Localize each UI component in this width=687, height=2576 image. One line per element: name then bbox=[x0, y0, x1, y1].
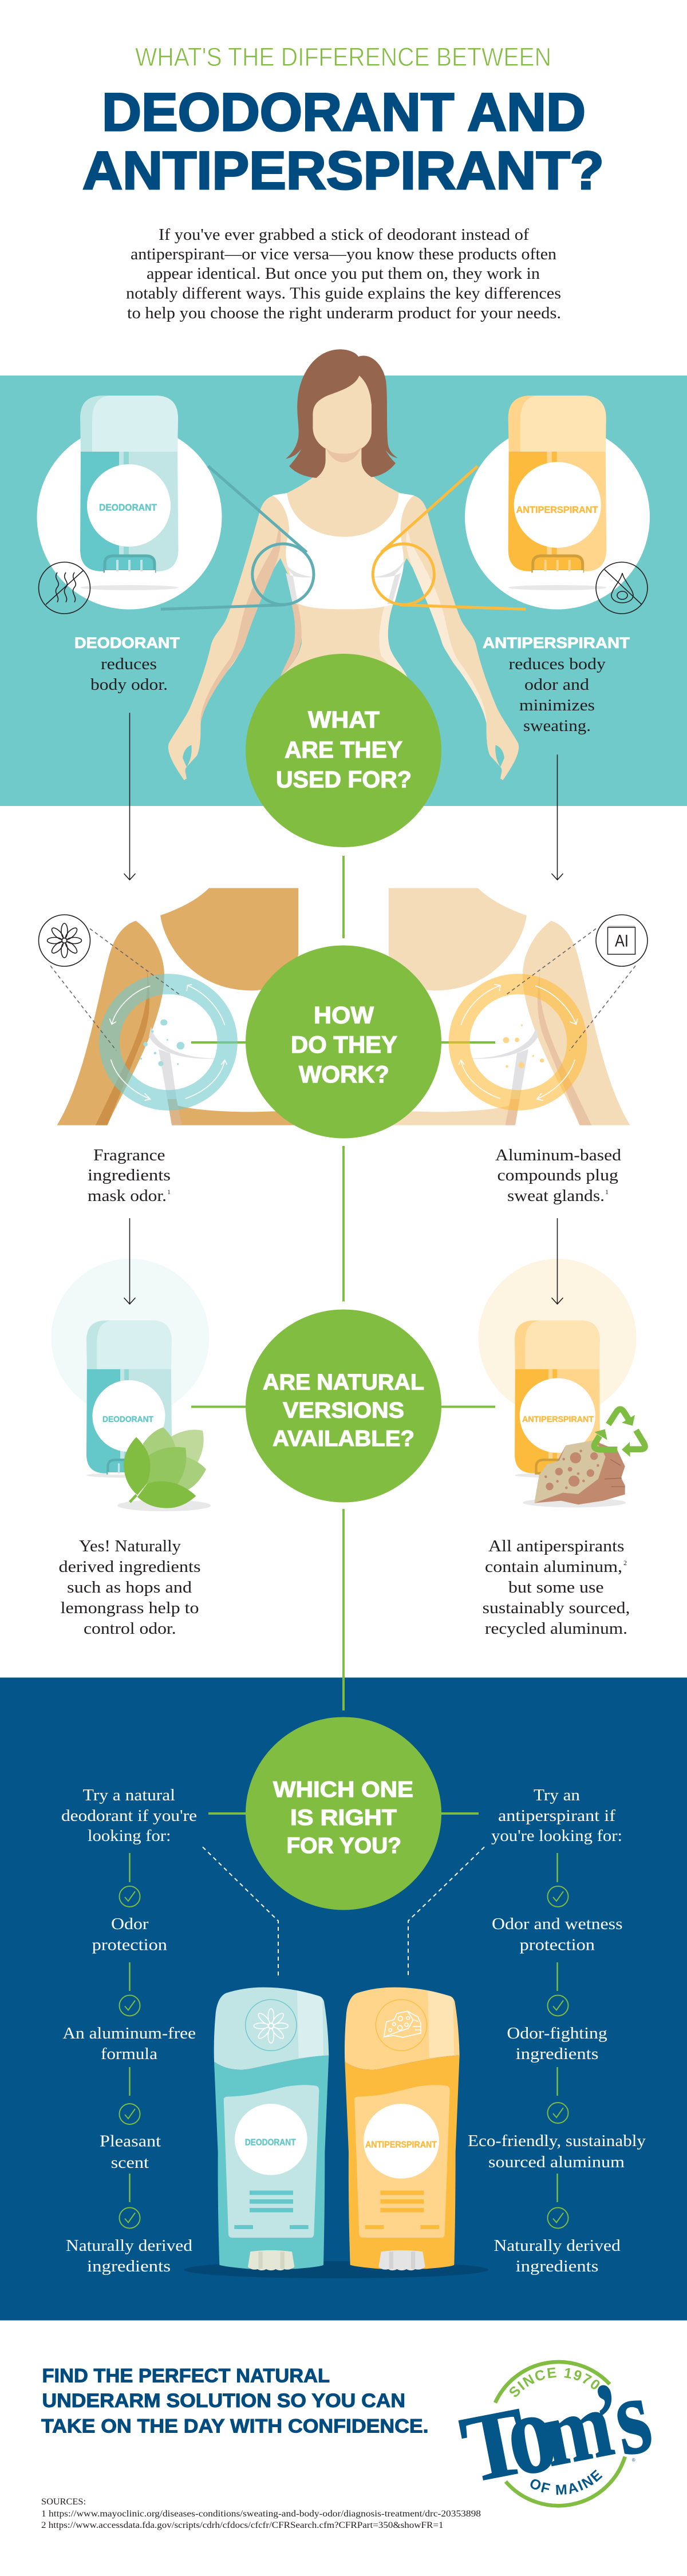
deodorant use text: body odor. bbox=[90, 676, 168, 694]
callout ring: right underarm bbox=[373, 466, 526, 609]
cap emblem: flower bbox=[246, 2000, 297, 2050]
deodorant mechanism text bbox=[88, 1147, 171, 1205]
antiperspirant use text: ANTIPERSPIRANT bbox=[483, 634, 630, 651]
deodorant use text bbox=[74, 634, 180, 694]
ring bbox=[99, 974, 238, 1111]
badge: how do they work: HOW bbox=[314, 1002, 374, 1028]
intro paragraph bbox=[126, 226, 561, 322]
antiperspirant checklist: Odor and wetness bbox=[492, 1915, 623, 1933]
deodorant checklist bbox=[61, 1787, 197, 2275]
arrow: to natural antiperspirant bbox=[552, 1218, 563, 1304]
closing statement bbox=[41, 2365, 428, 2437]
antiperspirant mechanism text: sweat glands. bbox=[507, 1187, 605, 1205]
logo: Tom's of Maine: ® bbox=[632, 2458, 635, 2463]
callout ring: left underarm bbox=[161, 466, 314, 609]
illustration: deodorant stick large: DEODORANT bbox=[245, 2138, 296, 2147]
badge: are natural versions available: VERSIONS bbox=[283, 1398, 404, 1423]
icon: no odor bbox=[39, 562, 90, 614]
badge: what are they used for bbox=[246, 654, 441, 847]
antiperspirant checklist: protection bbox=[520, 1937, 595, 1954]
intro paragraph: to help you choose the right underarm product for your needs. bbox=[127, 304, 561, 322]
arrow: deodorant down bbox=[124, 713, 135, 880]
deodorant mechanism text: mask odor. bbox=[88, 1187, 167, 1205]
pale circle left bbox=[52, 1259, 210, 1417]
intro paragraph: antiperspirant—or vice versa—you know these products often bbox=[131, 245, 557, 263]
natural antiperspirant text: sustainably sourced, bbox=[483, 1599, 630, 1617]
antiperspirant mechanism text bbox=[495, 1147, 621, 1205]
main title: ANTIPERSPIRANT? bbox=[82, 140, 604, 200]
logo: Tom's of Maine: ’ bbox=[587, 2362, 630, 2471]
deodorant mechanism text: Fragrance bbox=[93, 1147, 165, 1164]
badge: how do they work bbox=[246, 946, 441, 1138]
check icons bbox=[119, 1886, 140, 2228]
logo: Tom's of Maine: SINCE 1970 bbox=[510, 2368, 600, 2397]
natural antiperspirant text: recycled aluminum. bbox=[485, 1620, 627, 1638]
deodorant checklist: formula bbox=[101, 2045, 158, 2063]
badge: which one is right for you: WHICH ONE bbox=[273, 1777, 413, 1802]
panel: which one is right for you bbox=[0, 1677, 687, 2321]
sources: 1 https://www.mayoclinic.org/diseases-conditions/sweating-and-body-odor/diagnosis-treatment/drc-20353898 bbox=[41, 2509, 481, 2519]
sources: SOURCES: bbox=[41, 2497, 86, 2507]
deodorant stick bbox=[80, 396, 179, 590]
intro paragraph: notably different ways. This guide explains the key differences bbox=[126, 284, 561, 302]
antiperspirant mechanism text: compounds plug bbox=[497, 1167, 618, 1184]
badge: what are they used for: WHAT bbox=[308, 706, 380, 733]
antiperspirant use text: reduces body bbox=[508, 655, 606, 673]
illustration: woman bbox=[161, 349, 526, 780]
ring bbox=[449, 974, 587, 1111]
panel: footer call to action bbox=[41, 2354, 660, 2530]
closing statement: UNDERARM SOLUTION SO YOU CAN bbox=[42, 2390, 405, 2412]
shadow under sticks bbox=[184, 2261, 488, 2278]
deodorant checklist: An aluminum-free bbox=[62, 2025, 196, 2042]
badge: which one is right for you bbox=[246, 1717, 441, 1910]
pale circle right bbox=[479, 1259, 637, 1417]
body bbox=[168, 442, 519, 780]
antiperspirant stick small: ANTIPERSPIRANT bbox=[522, 1415, 594, 1424]
antiperspirant checklist: antiperspirant if bbox=[498, 1807, 616, 1825]
white circle behind deodorant bbox=[37, 425, 222, 609]
illustration: deodorant stick large bbox=[214, 1988, 329, 2270]
antiperspirant checklist: Try an bbox=[534, 1787, 580, 1804]
deodorant mechanism text: 1 bbox=[167, 1188, 171, 1196]
deodorant use text: reduces bbox=[101, 655, 157, 673]
deodorant checklist: Naturally derived bbox=[66, 2237, 192, 2255]
main title bbox=[82, 82, 604, 200]
natural deodorant text: control odor. bbox=[84, 1620, 176, 1638]
badge: how do they work: DO THEY bbox=[291, 1031, 397, 1058]
hair bbox=[286, 349, 398, 478]
badge: what are they used for: ARE THEY bbox=[285, 736, 402, 762]
panel: how do they work bbox=[39, 856, 647, 1302]
deodorant checklist: Pleasant bbox=[100, 2133, 161, 2150]
white bra bbox=[273, 493, 414, 609]
logo: Tom's of Maine bbox=[453, 2354, 660, 2508]
antiperspirant checklist: you're looking for: bbox=[491, 1827, 622, 1845]
arrow: antiperspirant down bbox=[552, 754, 563, 880]
natural antiperspirant text: but some use bbox=[508, 1579, 604, 1597]
deodorant mechanism text: ingredients bbox=[88, 1167, 171, 1184]
icon: aluminum element: AI bbox=[615, 932, 629, 950]
natural antiperspirant text: 2 bbox=[623, 1559, 627, 1567]
logo: Tom's of Maine: m bbox=[534, 2372, 620, 2486]
logo: Tom's of Maine: T bbox=[453, 2387, 536, 2503]
deodorant stick: DEODORANT bbox=[99, 502, 157, 513]
deodorant checklist: ingredients bbox=[87, 2258, 171, 2275]
closing statement: TAKE ON THE DAY WITH CONFIDENCE. bbox=[41, 2416, 428, 2437]
deodorant checklist: Odor bbox=[111, 1915, 149, 1933]
antiperspirant use text bbox=[483, 634, 630, 735]
antiperspirant use text: sweating. bbox=[523, 717, 591, 735]
intro paragraph: If you've ever grabbed a stick of deodorant instead of bbox=[159, 226, 529, 244]
title block bbox=[82, 42, 604, 322]
antiperspirant checklist: ingredients bbox=[516, 2045, 598, 2063]
illustration: deodorant underarm bbox=[57, 888, 298, 1125]
deodorant use text: DEODORANT bbox=[74, 634, 180, 651]
white circle behind antiperspirant bbox=[465, 425, 650, 609]
arrow: to natural deodorant bbox=[124, 1218, 135, 1304]
illustration: leaves bbox=[117, 1427, 211, 1511]
natural antiperspirant text: All antiperspirants bbox=[488, 1538, 624, 1555]
logo: Tom's of Maine: OF MAINE bbox=[530, 2470, 602, 2495]
deodorant stick small: DEODORANT bbox=[102, 1415, 153, 1424]
antiperspirant checklist: sourced aluminum bbox=[488, 2154, 625, 2171]
main title: DEODORANT AND bbox=[102, 82, 586, 142]
antiperspirant mechanism text: Aluminum-based bbox=[495, 1147, 621, 1164]
icon: flower fragrance bbox=[39, 915, 90, 966]
closing statement: FIND THE PERFECT NATURAL bbox=[42, 2365, 330, 2387]
antiperspirant checklist: ingredients bbox=[516, 2258, 598, 2275]
natural antiperspirant text: contain aluminum, bbox=[485, 1558, 622, 1576]
antiperspirant checklist bbox=[468, 1787, 646, 2275]
badge: are natural versions available: AVAILABLE? bbox=[273, 1427, 414, 1451]
badge: what are they used for: USED FOR? bbox=[276, 766, 412, 792]
badge: are natural versions available: ARE NATURAL bbox=[263, 1370, 424, 1394]
panel: what are they used for bbox=[0, 349, 687, 806]
antiperspirant use text: minimizes bbox=[519, 697, 595, 714]
icon: aluminum element bbox=[596, 915, 647, 966]
deodorant stick small bbox=[86, 1321, 172, 1477]
illustration: antiperspirant underarm bbox=[389, 888, 630, 1125]
deodorant checklist: deodorant if you're bbox=[61, 1807, 197, 1825]
deodorant checklist: scent bbox=[111, 2154, 149, 2172]
intro paragraph: appear identical. But once you put them on, they work in bbox=[147, 264, 540, 283]
deodorant checklist: Try a natural bbox=[83, 1787, 175, 1804]
badge: which one is right for you: IS RIGHT bbox=[290, 1805, 397, 1830]
dashed callouts bbox=[50, 929, 635, 1050]
sources: 2 https://www.accessdata.fda.gov/scripts/cdrh/cfdocs/cfcfr/CFRSearch.cfm?CFRPart=350&showFR=1 bbox=[41, 2520, 444, 2530]
illustration: bauxite rock and recycling bbox=[523, 1409, 645, 1507]
natural deodorant text bbox=[58, 1538, 200, 1638]
sources bbox=[41, 2497, 481, 2530]
icon: no sweat bbox=[596, 562, 647, 614]
deodorant checklist: protection bbox=[92, 1937, 167, 1954]
cap emblem: rock bbox=[376, 2000, 427, 2050]
antiperspirant stick: ANTIPERSPIRANT bbox=[516, 504, 598, 515]
badge: how do they work: WORK? bbox=[299, 1061, 389, 1088]
neck and face bbox=[317, 442, 373, 478]
illustration: antiperspirant stick large bbox=[345, 1988, 460, 2270]
illustration: antiperspirant stick large: ANTIPERSPIRANT bbox=[365, 2140, 437, 2150]
antiperspirant checklist: Eco-friendly, sustainably bbox=[468, 2132, 646, 2150]
kicker heading: WHAT'S THE DIFFERENCE BETWEEN bbox=[135, 42, 551, 72]
check icons bbox=[547, 1886, 568, 2228]
badge: which one is right for you: FOR YOU? bbox=[286, 1834, 401, 1858]
antiperspirant stick small bbox=[515, 1321, 601, 1477]
deodorant checklist: looking for: bbox=[88, 1827, 171, 1845]
badge: are natural versions available bbox=[246, 1310, 441, 1502]
natural deodorant text: Yes! Naturally bbox=[79, 1538, 181, 1555]
antiperspirant checklist: Naturally derived bbox=[493, 2237, 621, 2255]
antiperspirant mechanism text: 1 bbox=[605, 1188, 609, 1196]
antiperspirant checklist: Odor-fighting bbox=[507, 2025, 607, 2042]
logo: Tom's of Maine: s bbox=[604, 2354, 660, 2479]
antiperspirant stick bbox=[508, 396, 607, 590]
dashed connectors bbox=[203, 1847, 484, 1976]
natural deodorant text: lemongrass help to bbox=[61, 1599, 199, 1617]
natural antiperspirant text bbox=[483, 1538, 630, 1638]
antiperspirant use text: odor and bbox=[524, 676, 589, 694]
logo: Tom's of Maine: o bbox=[495, 2367, 565, 2500]
panel: are natural versions available bbox=[52, 1218, 645, 1710]
natural deodorant text: derived ingredients bbox=[58, 1558, 200, 1576]
natural deodorant text: such as hops and bbox=[67, 1579, 192, 1597]
